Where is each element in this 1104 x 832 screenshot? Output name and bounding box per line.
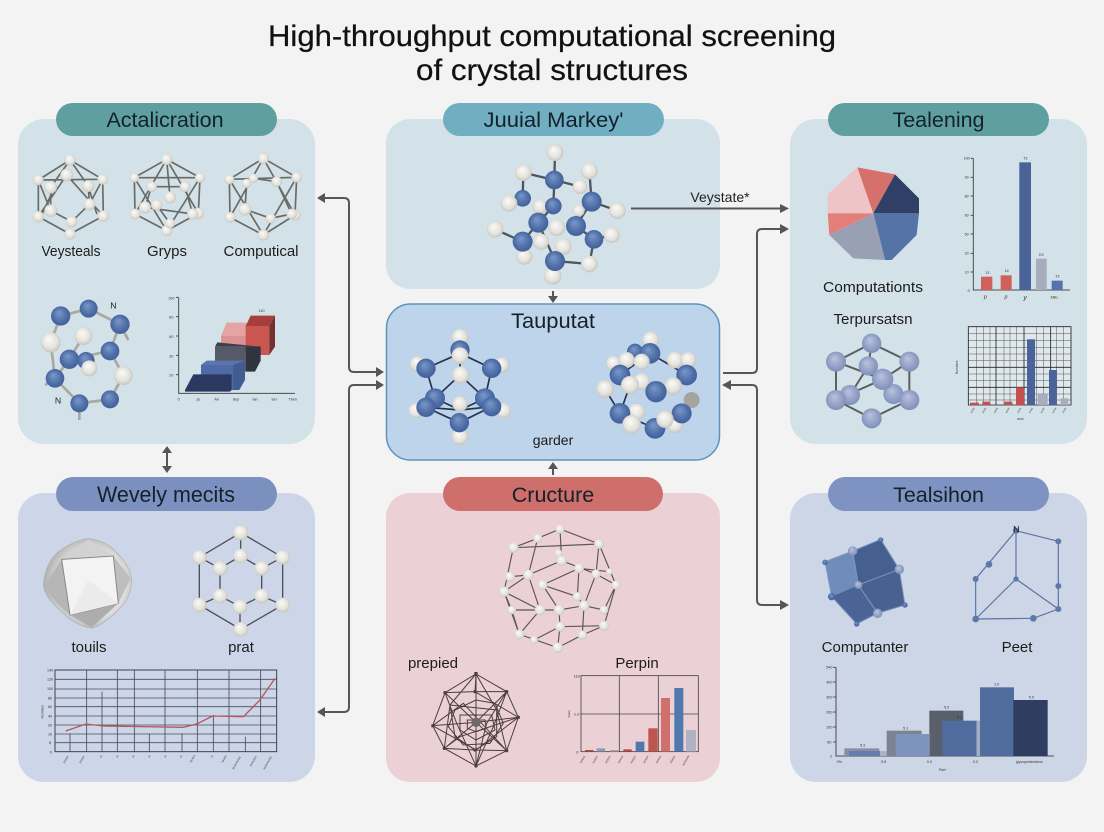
heading: Cructure: Cructure [512, 483, 594, 507]
3D bar chart: Ian [252, 398, 258, 402]
crystal: cube [826, 334, 919, 428]
3D bar chart: 20 [169, 374, 173, 378]
heading: Cructure [443, 477, 663, 511]
grid bar chart: xxxx [1061, 406, 1068, 414]
line chart: 140 [47, 669, 53, 673]
crystal: Gryps [130, 154, 205, 236]
panel: Juuial Markey [386, 103, 720, 289]
bar chart: top right: 10 [965, 270, 969, 274]
heading: Wevely mecits: Wevely mecits [97, 482, 235, 507]
line chart: x [164, 754, 166, 758]
line chart: x [132, 754, 134, 758]
bar chart: stepped: Part [939, 768, 946, 772]
bar chart: stepped: 540 [826, 666, 832, 670]
line chart: 60 [48, 705, 52, 709]
bar chart: Perpin: Value [567, 710, 571, 718]
arrow: top panel down to center [548, 291, 558, 303]
bar chart: stepped: 2 [830, 754, 832, 758]
bar chart: Perpin: 0 [576, 749, 579, 754]
3D bar chart: 80 [169, 316, 173, 320]
bar chart: Perpin [567, 673, 698, 767]
molecule: N [55, 395, 61, 405]
line chart: xxxxxxxxx [231, 755, 242, 770]
bar chart: top right: 20 [965, 252, 969, 256]
bar chart: top right: T3 [1023, 156, 1027, 160]
line chart: Numbers [40, 705, 44, 718]
panel: Tauputat [386, 304, 720, 460]
heading: Tealening [828, 103, 1049, 136]
3D bar chart: 100 [168, 296, 174, 300]
molecule: right [596, 332, 700, 439]
heading: Tealsihon [828, 477, 1049, 511]
crystal: hexagonal [192, 525, 290, 637]
line chart: xxxxxxx [248, 755, 258, 767]
grid bar chart: Numbers [955, 360, 959, 374]
panel: Cructure [386, 477, 720, 782]
label: touils: touils [71, 639, 107, 656]
line chart: xxxxx [220, 754, 228, 763]
3D bar chart: 0 [178, 398, 180, 402]
bar chart: stepped: glycoprotections [1016, 760, 1043, 764]
bar chart: top right: 90 [965, 176, 969, 180]
label: Perpin: Perpin [615, 655, 659, 672]
heading: Tealsihon: Tealsihon [893, 483, 984, 507]
crystal: faceted ball [43, 538, 132, 628]
panel: Wevely mecits [18, 477, 315, 782]
3D bar chart: Sep [233, 398, 239, 402]
grid bar chart [955, 327, 1071, 421]
3D bar chart [168, 296, 297, 402]
label: prat: prat [228, 639, 255, 656]
heading: Actalicration [56, 103, 277, 136]
bar chart: top right [964, 156, 1070, 301]
bar chart: Perpin: xxxxx [579, 755, 586, 764]
line chart: 20 [48, 723, 52, 727]
grid bar chart: xxxx [1028, 406, 1034, 414]
panel: Actalicration [18, 103, 315, 444]
label: prepied: prepied [408, 655, 458, 672]
bar chart: stepped: 5.0 [1029, 695, 1034, 699]
3D bar chart: Then [288, 398, 297, 402]
3D bar chart: Sei [271, 398, 277, 402]
label: Veysteals: Veysteals [42, 243, 100, 260]
3D bar chart: Jp [196, 398, 200, 402]
crystal: wire frame: N [1013, 524, 1020, 534]
crystal: blue cube [822, 537, 908, 627]
heading: Juuial Markey [443, 103, 664, 136]
crystal: Veysteals [33, 154, 109, 240]
bar chart: stepped: 5.1 [957, 716, 962, 720]
network diagram [431, 672, 520, 768]
bar chart: top right: 80 [965, 194, 969, 198]
heading: Tealening: Tealening [892, 108, 985, 132]
3D bar chart: 60 [169, 335, 173, 339]
bar chart: top right: 14 [1005, 269, 1009, 273]
bar chart: stepped: 5.3 [860, 744, 865, 748]
line chart: xxxxx [78, 755, 86, 764]
grid bar chart: xxxx [1039, 406, 1046, 414]
bar chart: top right: 0 [968, 289, 970, 293]
line chart: x [148, 754, 150, 758]
grid bar chart: xxxx [1016, 406, 1023, 414]
arrow: top panel to Tealening [631, 204, 789, 213]
line chart: 80 [48, 696, 52, 700]
heading: Tauputat: Tauputat [511, 310, 595, 333]
line chart: xxxxx [189, 754, 196, 763]
3D bar chart: Ab [214, 398, 219, 402]
molecule: large [487, 144, 626, 285]
title: High-throughput computational screening [268, 20, 836, 53]
line chart: x [211, 754, 213, 758]
grid bar chart: xxxx [969, 406, 976, 414]
title [268, 20, 836, 87]
line chart: 100 [47, 687, 53, 691]
bar chart: stepped: 0% [837, 760, 843, 764]
panel: Tealening [790, 103, 1087, 444]
title: of crystal structures [416, 54, 688, 87]
grid bar chart: xxxx [993, 406, 999, 414]
bar chart: top right: y [1022, 294, 1027, 301]
line chart: x [116, 754, 118, 758]
pie chart [828, 167, 919, 260]
heading: Actalicration: Actalicration [106, 108, 224, 132]
molecule: left [408, 329, 511, 445]
grid bar chart: xxxx [1004, 406, 1011, 414]
bar chart: top right: p [1004, 294, 1008, 300]
arrow: double vertical, left panels [162, 446, 172, 473]
bar chart: stepped: 300 [826, 695, 832, 699]
bar chart: stepped: 50 [827, 740, 831, 744]
grid bar chart: xxxx [1051, 406, 1058, 414]
arrow: center to Tealening [723, 224, 789, 373]
bar chart: top right: xau [1051, 295, 1058, 300]
bar chart: top right: 13 [985, 271, 989, 275]
bar chart: stepped: 0.0 [973, 760, 978, 764]
molecule: N [110, 301, 116, 311]
bar chart: top right: T3 [1055, 275, 1059, 279]
bar chart: Perpin: xxxxx [604, 755, 612, 764]
bar chart: Perpin: xxxxxxx [681, 754, 691, 767]
bar chart: top right: 50 [965, 232, 969, 236]
label: garder: garder [533, 432, 574, 448]
label: Peet: Peet [1002, 639, 1033, 656]
label: Computanter: Computanter [822, 639, 908, 656]
3D bar chart: 110 [259, 309, 265, 313]
bar chart: Perpin: 110 [573, 673, 581, 678]
heading: Wevely mecits [56, 477, 277, 511]
arrow: double, center to Tealsihon [722, 380, 789, 610]
bar chart: stepped: 1.0 [994, 683, 999, 687]
bar chart: stepped: 5.8 [881, 760, 886, 764]
bar chart: top right: E3 [1039, 253, 1044, 257]
crystal: Computical [224, 153, 302, 241]
label: Veystate: Veystate* [690, 189, 750, 205]
crystal: wire sphere [499, 524, 621, 653]
bar chart: stepped: 5.0 [944, 706, 949, 710]
bar chart: stepped: 400 [826, 680, 832, 684]
line chart: xxxxxxxxx [262, 755, 273, 770]
bar chart: Perpin: xxxxx [642, 755, 650, 764]
bar chart: stepped: 200 [826, 710, 832, 714]
arrow: double, top left panel to center [317, 193, 384, 377]
bar chart: stepped: 100 [826, 725, 832, 729]
panel: Tealsihon [790, 477, 1087, 782]
bar chart: Perpin: xxxxx [617, 755, 624, 764]
bar chart: Perpin: 1.0 [574, 711, 580, 716]
grid bar chart: xxxx [981, 406, 988, 414]
line chart: xxxxx [62, 755, 70, 764]
molecule [41, 300, 133, 420]
bar chart: Perpin: xxxxx [655, 755, 662, 764]
grid bar chart: xxxx [1017, 417, 1024, 421]
3D bar chart: 30 [169, 354, 173, 358]
label: Computical: Computical [223, 243, 299, 260]
bar chart: top right: 100 [964, 157, 970, 161]
crystal: wire frame [972, 524, 1061, 622]
heading: Juuial Markey: Juuial Markey' [484, 108, 624, 132]
label: Gryps: Gryps [147, 243, 187, 260]
label: Computationts: Computationts [823, 279, 923, 296]
line chart: 0 [50, 750, 52, 754]
label: Terpursatsn: Terpursatsn [834, 311, 912, 328]
bar chart: Perpin: xxxxx [669, 755, 676, 764]
arrow: double, center to lower left panel [317, 380, 384, 717]
line chart [40, 669, 277, 770]
bar chart: Perpin: xxxxx [591, 755, 599, 764]
line chart: x [180, 754, 182, 758]
line chart: 40 [48, 714, 52, 718]
line chart: 120 [47, 678, 53, 682]
bar chart: stepped: 5.1 [903, 726, 908, 730]
line chart: 10 [48, 732, 52, 736]
arrow: bottom panel up to center [548, 462, 558, 475]
bar chart: stepped: 0.0 [927, 760, 932, 764]
bar chart: top right: 60 [965, 214, 969, 218]
bar chart: stepped [826, 666, 1054, 772]
bar chart: top right: p [983, 294, 987, 300]
bar chart: Perpin: xxxxx [629, 755, 637, 764]
line chart: x [100, 754, 102, 758]
line chart: 5 [49, 741, 51, 745]
